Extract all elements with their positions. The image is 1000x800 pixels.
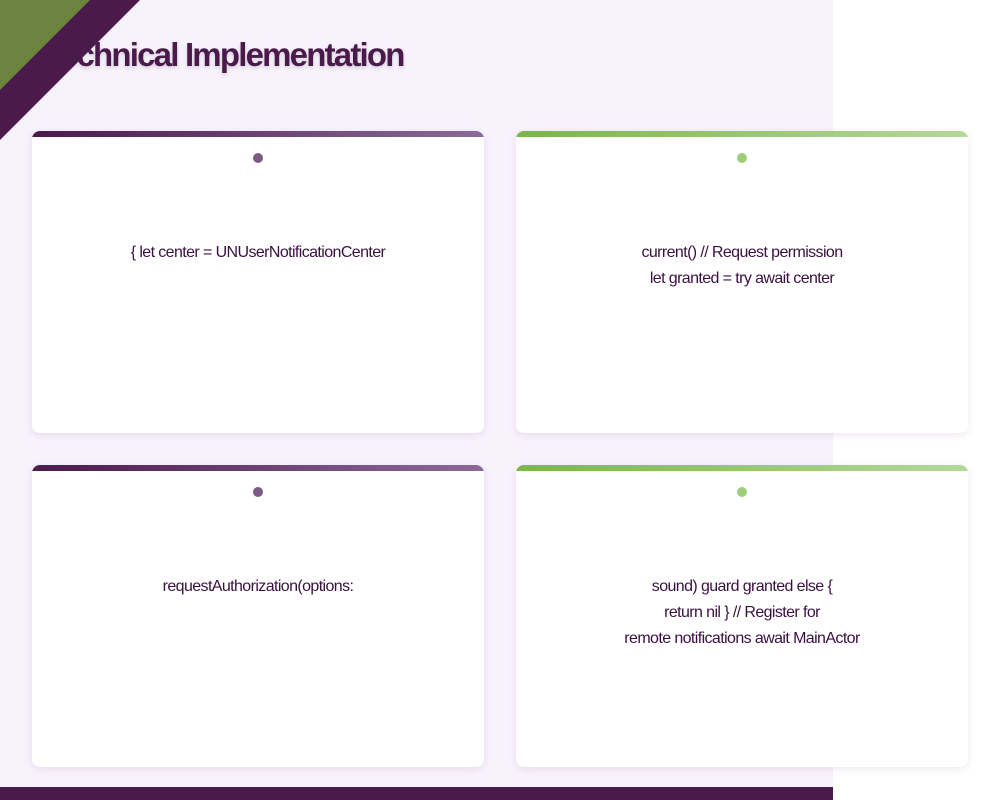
card 4: remote notifications await MainActor xyxy=(624,630,860,647)
title: Technical Implementation xyxy=(44,36,404,73)
card 3 xyxy=(32,465,484,767)
card 2: current() // Request permission xyxy=(641,244,843,261)
card 4 xyxy=(516,465,968,767)
card 1: { let center = UNUserNotificationCenter xyxy=(131,244,385,261)
card 1 xyxy=(32,131,484,433)
bottom bar xyxy=(0,787,833,800)
card 2 xyxy=(516,131,968,433)
card 3: requestAuthorization(options: xyxy=(163,578,353,595)
card 4: return nil } // Register for xyxy=(664,604,820,621)
corner decoration xyxy=(0,0,140,140)
card 2: let granted = try await center xyxy=(650,270,834,287)
card 4: sound) guard granted else { xyxy=(652,578,832,595)
